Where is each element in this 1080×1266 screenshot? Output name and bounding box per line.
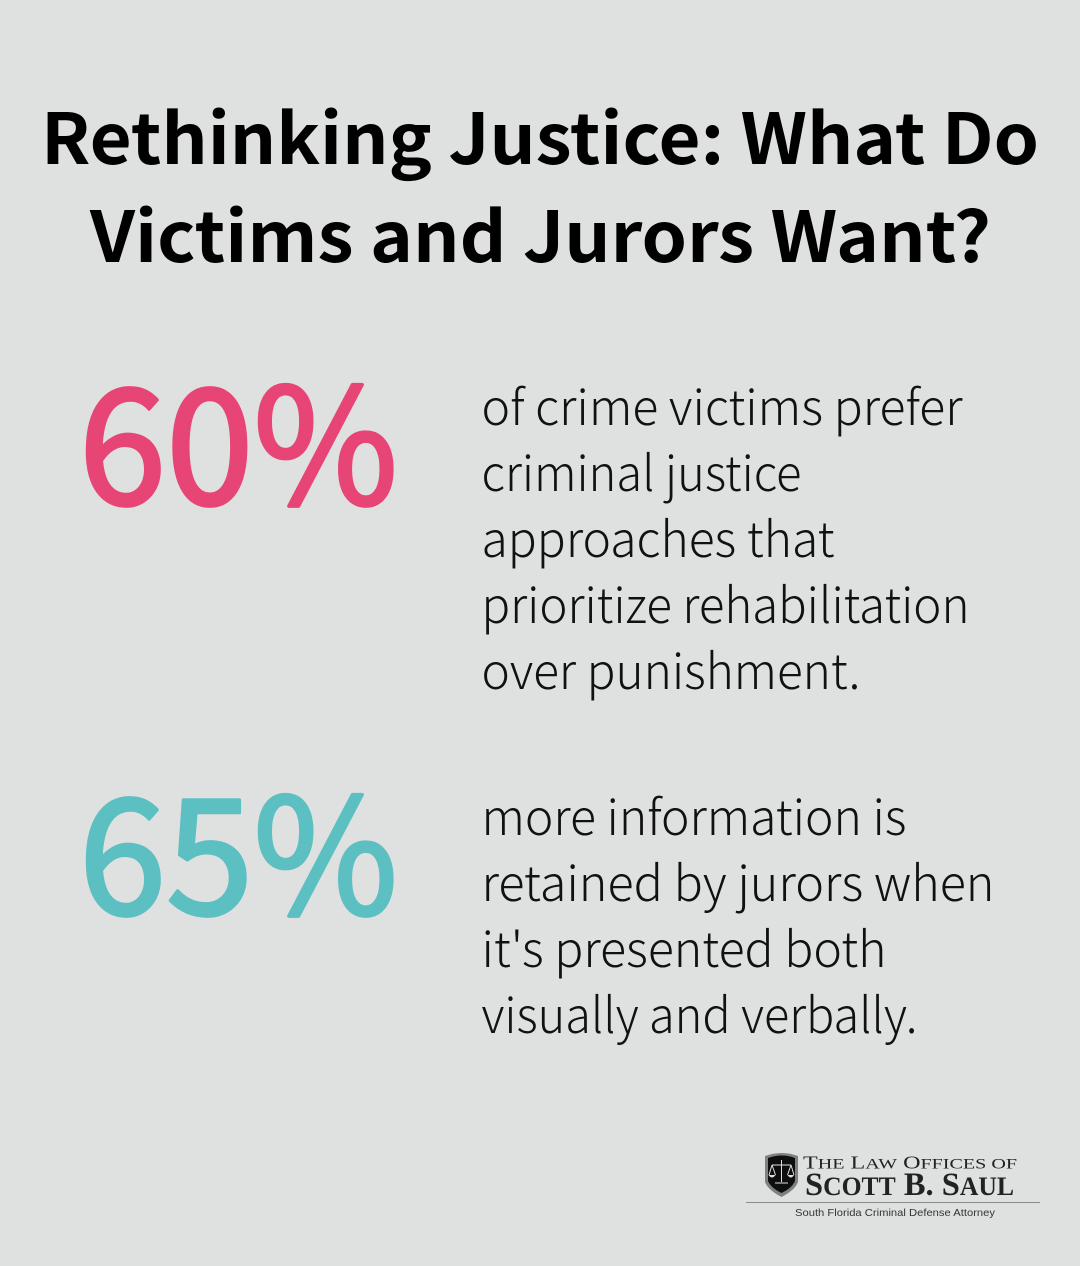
text block: jurors: more information is [482, 779, 906, 850]
text block: crime victims: criminal justice [482, 435, 802, 506]
text block: crime victims: of crime victims prefer [482, 369, 963, 440]
text block: jurors [482, 779, 994, 1048]
title [41, 84, 1039, 283]
logo [746, 1152, 1040, 1219]
title: Victims and Jurors Want? [89, 182, 991, 283]
text block: crime victims: over punishment. [482, 633, 860, 704]
text block: crime victims: approaches that [482, 501, 834, 572]
statistic: 60%: 60% [79, 319, 398, 551]
text block: jurors: it's presented both [482, 911, 886, 982]
divider line [746, 1202, 1040, 1203]
title: Rethinking Justice: What Do [41, 84, 1039, 185]
text block: jurors: retained by jurors when [482, 845, 994, 916]
text block: jurors: visually and verbally. [482, 977, 918, 1048]
text block: crime victims: prioritize rehabilitation [482, 567, 970, 638]
tagline: South Florida Criminal Defense Attorney [795, 1207, 996, 1219]
text block: crime victims [482, 369, 970, 704]
firm name: THE L AW O FFICES OF [803, 1152, 1017, 1172]
statistic: 65%: 65% [79, 729, 398, 961]
attorney name: SCOTT B. SAUL [805, 1167, 1014, 1203]
icon: shield with scales [765, 1153, 798, 1197]
